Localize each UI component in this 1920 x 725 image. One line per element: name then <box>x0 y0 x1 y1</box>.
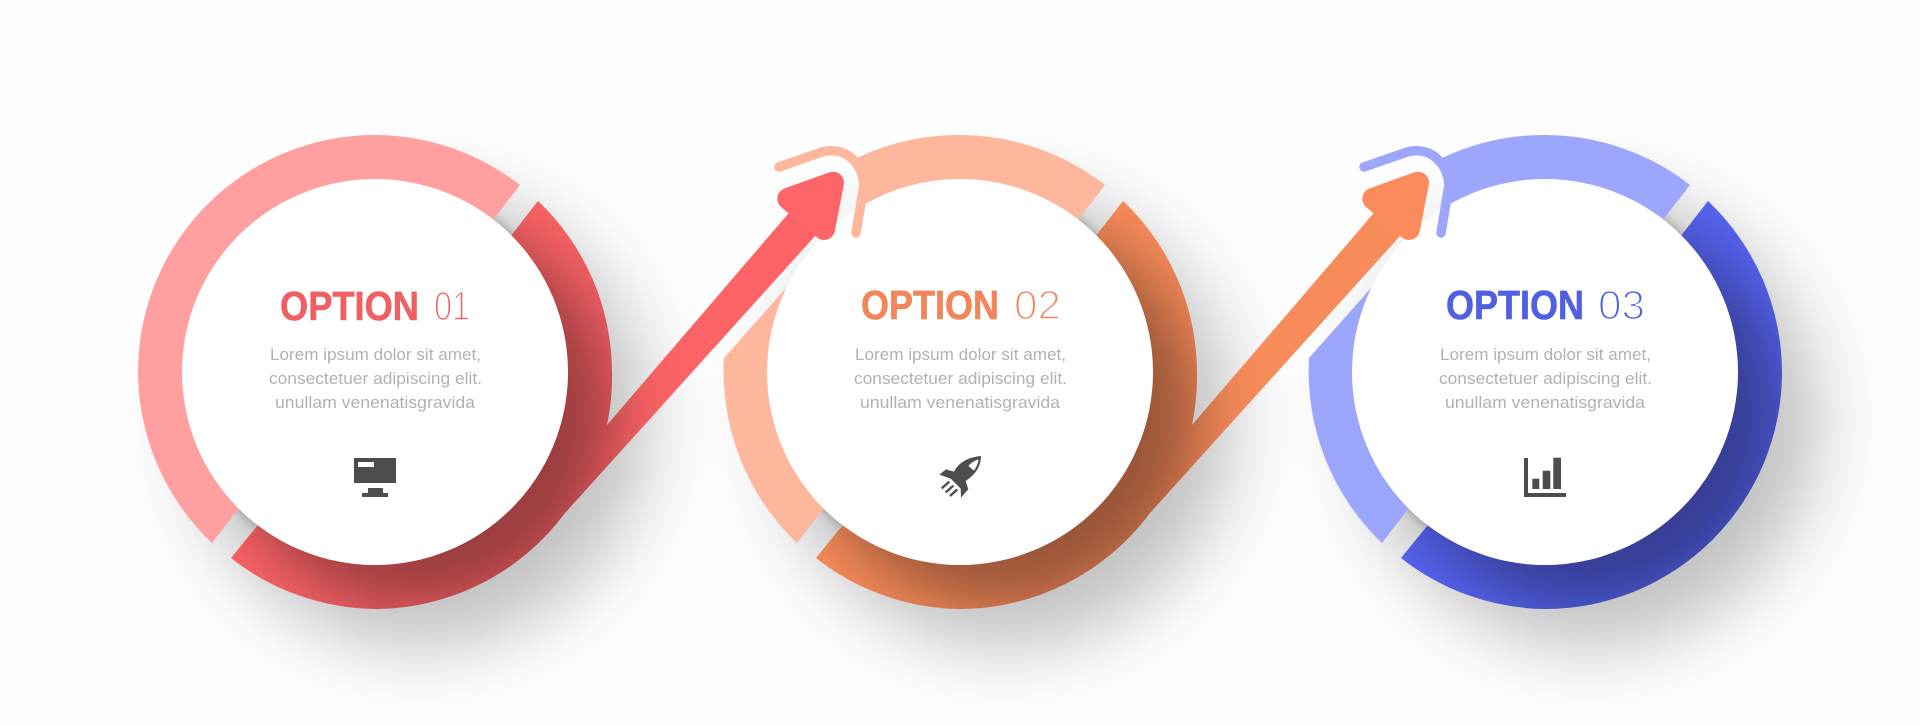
arrow head 2 <box>1373 183 1418 229</box>
light ring segment 1 <box>138 135 520 543</box>
heading: option 01: OPTION <box>280 283 419 329</box>
light ring segment 3 upper <box>1442 135 1690 372</box>
dark ring with arrow shaft 1 <box>231 200 825 609</box>
text block 2: Lorem ipsum dolor sit amet, <box>855 346 1066 364</box>
text block 1: consectetuer adipiscing elit. <box>269 370 482 388</box>
gap shadow 2 <box>820 214 1100 530</box>
gap shadow 1 <box>235 214 515 530</box>
white circle 3 <box>1352 179 1738 565</box>
text block 2 <box>854 346 1067 412</box>
gap shadow 3 <box>1405 214 1685 530</box>
panel: option 02 <box>724 135 1410 610</box>
text block 3 <box>1439 346 1652 412</box>
hook around arrow 2 <box>1364 151 1449 233</box>
text block 3: consectetuer adipiscing elit. <box>1439 370 1652 388</box>
ring shading 1 <box>225 220 615 610</box>
soft drop shadows <box>192 192 1818 648</box>
dark ring with arrow shaft 2 <box>816 200 1410 609</box>
hook around arrow 1 <box>779 151 864 233</box>
heading: option 02: OPTION <box>861 282 999 328</box>
light ring segment 2 upper <box>857 135 1105 372</box>
heading: option 01: 01 <box>434 283 470 329</box>
panel: option 01 <box>138 135 825 610</box>
ring shading 2 <box>810 220 1200 610</box>
white circle 2 <box>767 179 1153 565</box>
icon: rocket <box>939 456 981 498</box>
text block 3: unullam venenatisgravida <box>1445 394 1646 412</box>
panel: option 03 <box>1309 135 1785 610</box>
icon: bar chart <box>1524 458 1566 497</box>
light ring segment 2 lower <box>724 287 960 543</box>
ring shading 3 <box>1395 220 1785 610</box>
heading: option 02: 02 <box>1014 282 1061 328</box>
text block 2: consectetuer adipiscing elit. <box>854 370 1067 388</box>
arrow head 1 <box>788 183 833 229</box>
dark ring 3 <box>1401 201 1782 609</box>
heading: option 03: 03 <box>1598 282 1645 328</box>
text block 2: unullam venenatisgravida <box>860 394 1061 412</box>
icon: monitor <box>354 458 396 497</box>
text block 1 <box>269 346 482 412</box>
heading: option 03: OPTION <box>1446 282 1584 328</box>
text block 3: Lorem ipsum dolor sit amet, <box>1440 346 1651 364</box>
text block 1: Lorem ipsum dolor sit amet, <box>270 346 481 364</box>
text block 1: unullam venenatisgravida <box>275 394 476 412</box>
white circle 1 <box>182 179 568 565</box>
light ring segment 3 lower <box>1309 287 1545 543</box>
